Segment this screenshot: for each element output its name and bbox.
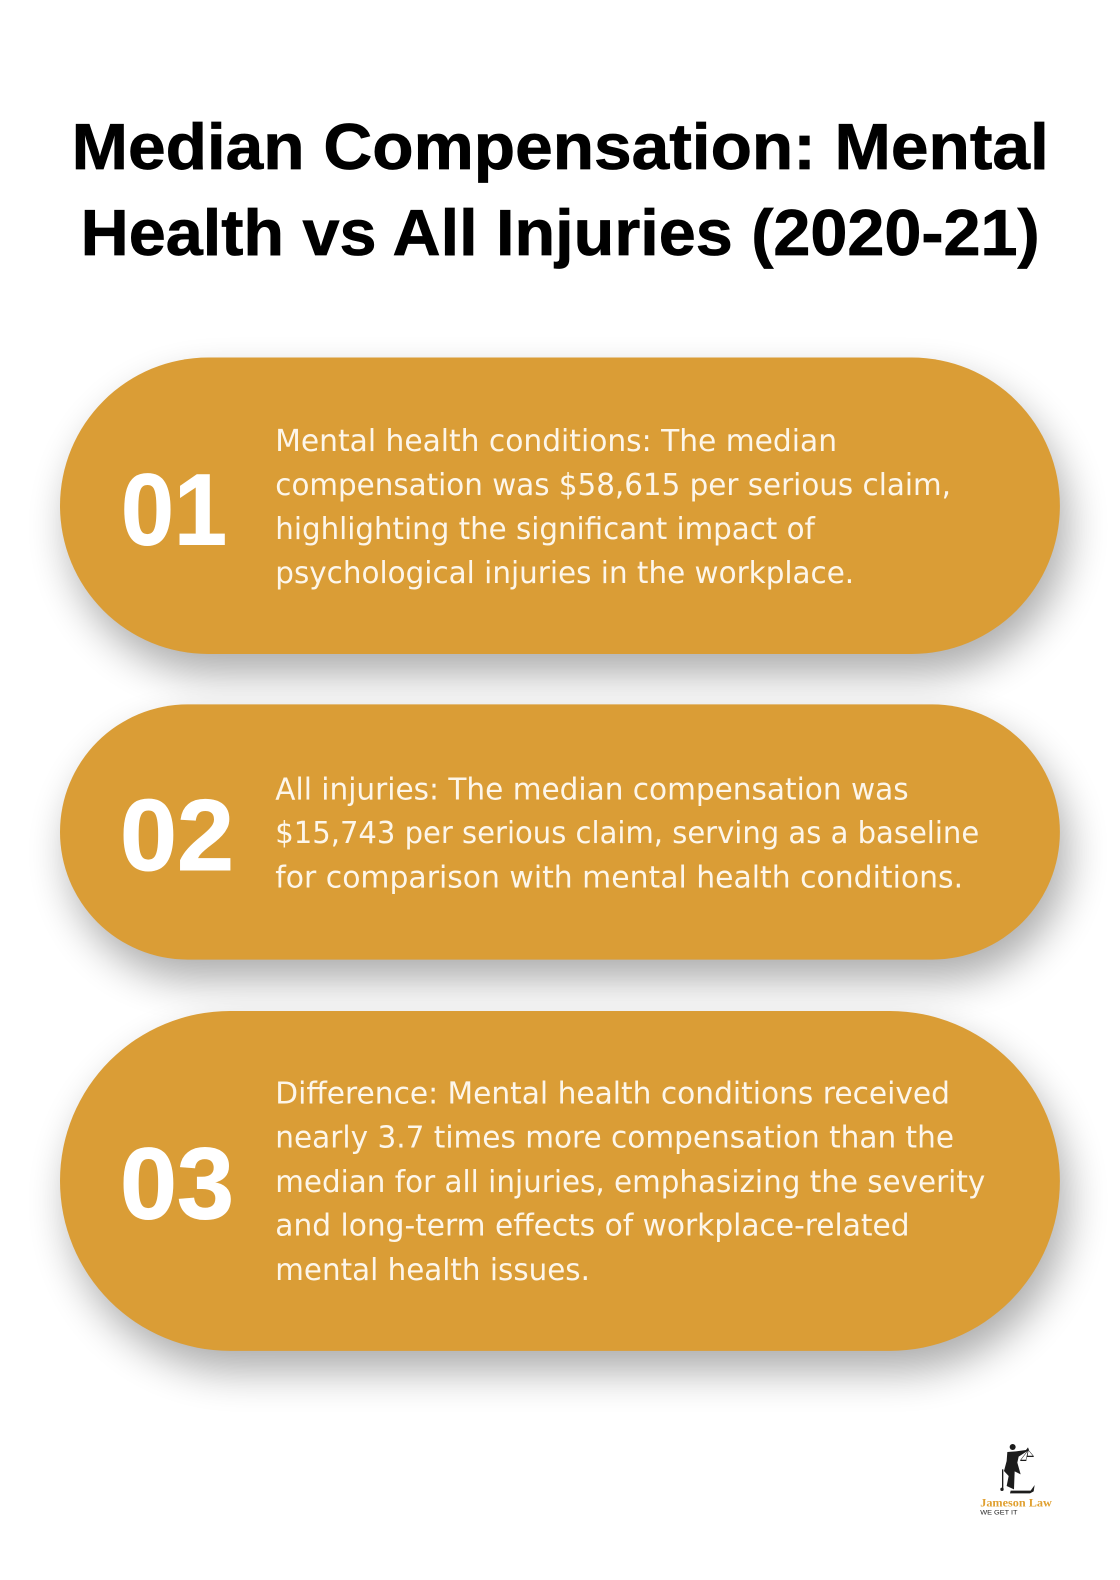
text: mental health conditions: psychological injuries in the workplace. xyxy=(275,556,854,591)
title: Median Compensation: Mental xyxy=(72,111,1049,183)
text: mental health conditions: Mental health conditions: The median xyxy=(275,424,837,459)
number 02: 02 xyxy=(120,780,234,892)
text: all injuries: $15,743 per serious claim, serving as a baseline xyxy=(275,816,979,851)
text: mental health conditions xyxy=(275,424,951,591)
text: difference: median for all injuries, emphasizing the severity xyxy=(275,1165,985,1200)
text: mental health conditions: highlighting the significant impact of xyxy=(275,512,816,547)
text: difference: Difference: Mental health conditions received xyxy=(275,1076,950,1111)
text: difference: mental health issues. xyxy=(275,1253,590,1288)
logo: Jameson Law xyxy=(980,1444,1052,1517)
number 03: 03 xyxy=(120,1129,234,1241)
text: all injuries: for comparison with mental health conditions. xyxy=(275,860,963,895)
panel: difference xyxy=(60,1011,1068,1372)
panel: mental health conditions xyxy=(60,358,1068,675)
icon: lady justice xyxy=(1000,1444,1035,1493)
text: all injuries: All injuries: The median compensation was xyxy=(275,773,909,808)
text: difference: nearly 3.7 times more compensation than the xyxy=(275,1121,954,1156)
title xyxy=(72,111,1049,269)
title: Health vs All Injuries (2020-21) xyxy=(81,197,1040,269)
number 01: 01 xyxy=(121,455,227,567)
text: all injuries xyxy=(275,773,979,895)
text: difference xyxy=(275,1076,985,1288)
text: mental health conditions: compensation was $58,615 per serious claim, xyxy=(275,468,951,503)
panel: all injuries xyxy=(60,704,1068,980)
logo tagline: WE GET IT xyxy=(980,1510,1018,1517)
logo name: Jameson Law xyxy=(980,1497,1052,1510)
text: difference: and long-term effects of workplace-related xyxy=(275,1208,910,1243)
